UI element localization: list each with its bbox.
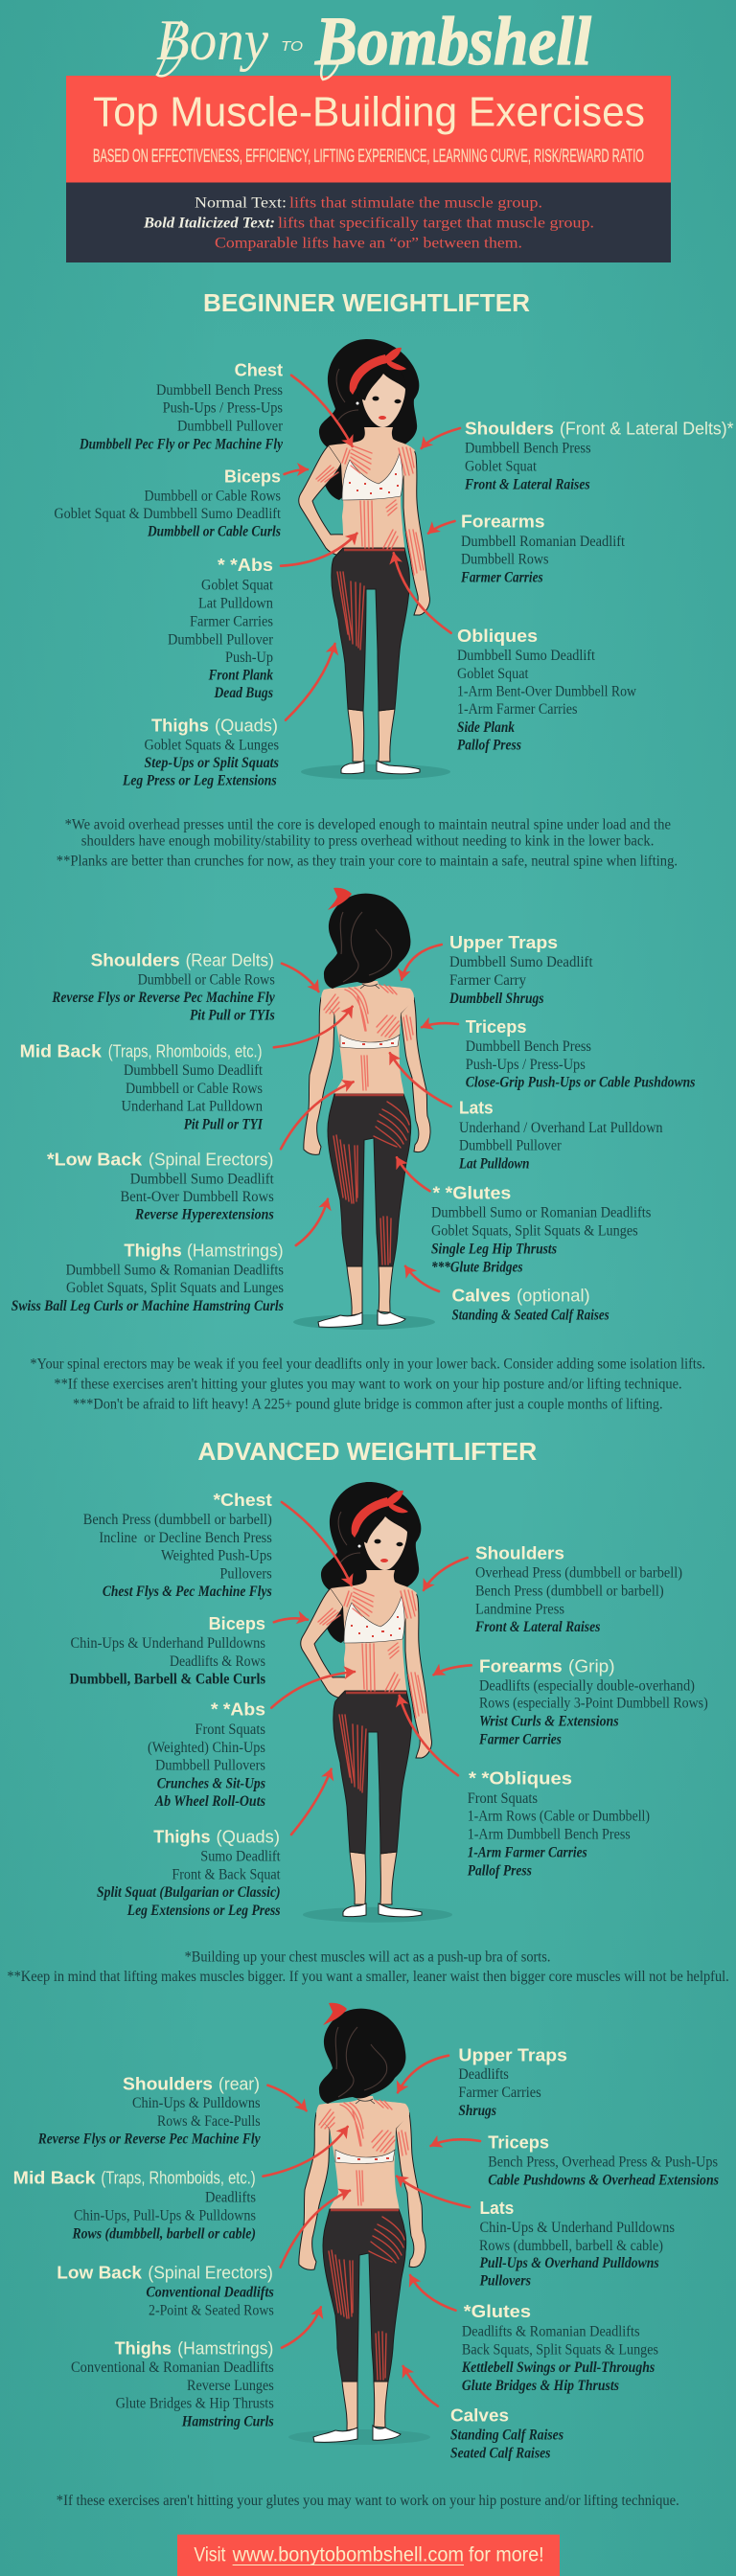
- footer text: Visit: [194, 2543, 226, 2565]
- list: calf lifts: Standing Calf Raises: [450, 2427, 564, 2443]
- panel: beginner shoulders: [464, 418, 734, 492]
- list: low back lifts: [121, 1171, 274, 1222]
- list: rear shoulder lifts: Pit Pull or TYIs: [190, 1008, 275, 1024]
- list: hamstring lifts: Glute Bridges & Hip Thrusts: [116, 2396, 274, 2412]
- list: abs lifts: Crunches & Sit-Ups: [157, 1775, 265, 1791]
- list: abs lifts: Push-Up: [225, 650, 273, 666]
- list: glute lifts: [461, 2323, 658, 2394]
- heading: shoulders front and lateral: (Front & Lateral Delts)*: [560, 418, 734, 438]
- list: chest lifts: Bench Press (dumbbell or barbell): [83, 1512, 272, 1528]
- list: oblique lifts: 1-Arm Farmer Carries: [468, 1844, 587, 1860]
- heading: shoulders: Shoulders: [475, 1542, 564, 1562]
- list: biceps lifts: Chin-Ups & Underhand Pulldowns: [71, 1635, 265, 1652]
- heading: upper traps: Upper Traps: [458, 2044, 567, 2064]
- heading: thighs hamstrings: [115, 2337, 273, 2358]
- list: hamstring lifts: Hamstring Curls: [181, 2414, 274, 2430]
- heading: mid back: [20, 1040, 262, 1060]
- footer banner: [177, 2535, 560, 2576]
- heading: obliques: Obliques: [457, 626, 538, 646]
- list: abs lifts: Front Squats: [195, 1721, 265, 1738]
- list: trap lifts: Deadlifts: [458, 2066, 509, 2083]
- list: oblique lifts: Front Squats: [468, 1790, 538, 1807]
- list: rear shoulder lifts: Reverse Flys or Reverse Pec Machine Fly: [52, 990, 275, 1006]
- list: trap lifts: [448, 954, 593, 1007]
- list: hamstring lifts: Dumbbell Sumo & Romanian Deadlifts: [66, 1263, 284, 1279]
- panel: beginner upper traps: [448, 932, 593, 1007]
- list: abs lifts: Ab Wheel Roll-Outs: [154, 1793, 265, 1810]
- list: chest lifts: [83, 1512, 272, 1600]
- list: low back lifts: 2-Point & Seated Rows: [149, 2303, 274, 2319]
- heading: beginner weightlifter: BEGINNER WEIGHTLIFTER: [203, 290, 530, 317]
- panel: beginner thighs: [122, 715, 279, 789]
- list: mid back lifts: Dumbbell Sumo Deadlift: [124, 1062, 264, 1079]
- list: lat lifts: [458, 1120, 663, 1173]
- heading: shoulders rear delts: [91, 949, 274, 969]
- list: glute lifts: Back Squats, Split Squats & Lunges: [462, 2341, 658, 2358]
- heading: thighs hamstrings: Thighs: [115, 2337, 172, 2358]
- heading: low back: Low Back: [57, 2262, 143, 2282]
- heading: shoulders rear delts: (Rear Delts): [186, 949, 274, 969]
- list: glute lifts: Deadlifts & Romanian Deadlifts: [462, 2323, 640, 2339]
- list: shoulder lifts: Front & Lateral Raises: [464, 476, 590, 492]
- legend: bold italic text: lifts that specifically target that muscle group.: [278, 216, 594, 232]
- notes: beginner back: **If these exercises aren't hitting your glutes you may want to work on your hip posture and/or lifting technique.: [54, 1377, 682, 1393]
- arrows: beginner front: [281, 376, 460, 720]
- heading: calves: Calves: [450, 2405, 509, 2425]
- list: forearm lifts: Dumbbell Romanian Deadlift: [461, 534, 626, 550]
- list: abs lifts: Front Plank: [208, 667, 273, 683]
- list: thigh lifts: Leg Press or Leg Extensions: [122, 773, 277, 789]
- panel: beginner biceps: [54, 466, 282, 539]
- list: hamstring lifts: Goblet Squats, Split Squats and Lunges: [66, 1280, 284, 1296]
- panel: beginner hamstrings: [12, 1241, 284, 1314]
- list: chest lifts: Dumbbell Pullover: [177, 419, 284, 435]
- list: abs lifts: Farmer Carries: [190, 613, 273, 629]
- list: biceps lifts: Deadlifts & Rows: [170, 1653, 265, 1670]
- heading: thighs quads: [153, 1826, 280, 1846]
- notes: beginner back: ***Don't be afraid to lift heavy! A 225+ pound glute bridge is common after just a couple months of lifting.: [73, 1397, 663, 1413]
- list: chest lifts: Incline or Decline Bench Press: [99, 1530, 272, 1546]
- list: abs lifts: (Weighted) Chin-Ups: [148, 1740, 265, 1756]
- notes: advanced front: *Building up your chest muscles will act as a push-up bra of sorts.: [185, 1949, 550, 1965]
- list: glute lifts: [431, 1205, 651, 1275]
- list: mid back lifts: Rows (dumbbell, barbell or cable): [72, 2225, 256, 2242]
- panel: advanced obliques: [468, 1768, 650, 1879]
- list: mid back lifts: Chin-Ups, Pull-Ups & Pulldowns: [74, 2208, 256, 2224]
- list: hamstring lifts: Conventional & Romanian Deadlifts: [71, 2359, 274, 2376]
- list: chest lifts: Dumbbell Bench Press: [156, 382, 283, 399]
- list: glute lifts: Single Leg Hip Thrusts: [431, 1241, 557, 1257]
- list: glute lifts: Goblet Squats, Split Squats & Lunges: [431, 1223, 638, 1240]
- logo: Bony to Bombshell: TO: [281, 38, 303, 55]
- list: oblique lifts: Side Plank: [457, 719, 515, 736]
- list: lat lifts: Chin-Ups & Underhand Pulldowns: [479, 2220, 675, 2236]
- heading: forearms: Forearms: [461, 512, 545, 532]
- heading: shoulders rear: Shoulders: [123, 2073, 213, 2093]
- list: chest lifts: Chest Flys & Pec Machine Flys: [103, 1584, 272, 1600]
- list: rear shoulder lifts: Reverse Flys or Reverse Pec Machine Fly: [37, 2131, 261, 2147]
- panel: advanced upper traps: [458, 2044, 567, 2119]
- list: lat lifts: Underhand / Overhand Lat Pulldown: [459, 1120, 663, 1136]
- list: shoulder lifts: Bench Press (dumbbell or barbell): [475, 1583, 664, 1599]
- heading: mid back: (Traps, Rhomboids, etc.): [108, 1040, 263, 1060]
- list: trap lifts: Farmer Carry: [449, 972, 526, 989]
- list: thigh lifts: [122, 737, 279, 789]
- list: trap lifts: Shrugs: [458, 2103, 496, 2119]
- list: triceps lifts: Close-Grip Push-Ups or Cable Pushdowns: [466, 1075, 696, 1091]
- panel: advanced triceps: [488, 2131, 719, 2188]
- list: glute lifts: Kettlebell Swings or Pull-Throughs: [461, 2359, 655, 2376]
- heading: shoulders rear: (rear): [218, 2073, 260, 2093]
- list: abs lifts: Dead Bugs: [214, 685, 273, 701]
- list: oblique lifts: 1-Arm Bent-Over Dumbbell Row: [457, 684, 637, 700]
- list: lat lifts: Dumbbell Pullover: [459, 1138, 563, 1154]
- heading: triceps: Triceps: [466, 1016, 527, 1037]
- heading: shoulders front and lateral: [465, 418, 734, 438]
- list: biceps lifts: Dumbbell, Barbell & Cable Curls: [69, 1672, 265, 1688]
- heading: biceps: Biceps: [224, 466, 281, 486]
- list: biceps lifts: Dumbbell or Cable Curls: [147, 523, 281, 539]
- panel: advanced lats: [479, 2198, 675, 2290]
- list: low back lifts: [146, 2285, 274, 2319]
- heading: lats: Lats: [459, 1098, 494, 1118]
- list: forearm lifts: Deadlifts (especially double-overhand): [479, 1677, 695, 1694]
- heading: glutes: * *Glutes: [433, 1183, 511, 1203]
- heading: triceps: Triceps: [488, 2131, 549, 2152]
- list: calf lifts: Standing & Seated Calf Raises: [452, 1307, 610, 1323]
- list: forearm lifts: Farmer Carries: [460, 569, 543, 585]
- footer text: [194, 2543, 544, 2565]
- list: low back lifts: Dumbbell Sumo Deadlift: [130, 1171, 274, 1187]
- heading: obliques: * *Obliques: [469, 1768, 572, 1789]
- heading: low back: (Spinal Erectors): [149, 1150, 273, 1170]
- panel: advanced hamstrings: [71, 2337, 274, 2430]
- list: abs lifts: Lat Pulldown: [198, 596, 273, 612]
- list: triceps lifts: [466, 1038, 696, 1091]
- heading: thighs hamstrings: [124, 1241, 284, 1261]
- heading: forearms grip: Forearms: [479, 1655, 563, 1676]
- notes: beginner front: **Planks are better than crunches for now, as they train your core to maintain a safe, neutral spine when lifting.: [57, 853, 678, 869]
- notes: advanced front: [7, 1949, 729, 1985]
- heading: calves optional: Calves: [452, 1285, 511, 1305]
- heading: upper traps: Upper Traps: [449, 932, 558, 952]
- heading: thighs quads: Thighs: [153, 1826, 211, 1846]
- notes: beginner front: [57, 817, 678, 869]
- heading: abs: * *Abs: [211, 1699, 265, 1720]
- heading: thighs quads: (Quads): [217, 1826, 280, 1846]
- legend: comparable lifts: Comparable lifts have an “or” between them.: [215, 236, 522, 252]
- list: biceps lifts: Dumbbell or Cable Rows: [144, 488, 281, 504]
- heading: thighs hamstrings: (Hamstrings): [187, 1241, 284, 1261]
- list: lat lifts: Rows (dumbbell, barbell & cable): [479, 2238, 663, 2254]
- panel: beginner calves: [452, 1285, 610, 1323]
- logo: Bony to Bombshell: [156, 3, 591, 80]
- list: glute lifts: Glute Bridges & Hip Thrusts: [462, 2378, 619, 2394]
- list: rear shoulder lifts: Chin-Ups & Pulldowns: [132, 2095, 261, 2111]
- list: thigh lifts: Front & Back Squat: [172, 1867, 281, 1883]
- list: chest lifts: Weighted Push-Ups: [161, 1547, 272, 1563]
- list: forearm lifts: Rows (especially 3-Point Dumbbell Rows): [479, 1696, 708, 1712]
- list: calf lifts: [450, 2427, 564, 2461]
- list: oblique lifts: 1-Arm Farmer Carries: [457, 701, 577, 718]
- list: thigh lifts: Sumo Deadlift: [200, 1849, 281, 1865]
- list: shoulder lifts: Dumbbell Bench Press: [465, 441, 591, 457]
- panel: advanced glutes: [461, 2301, 658, 2394]
- list: thigh lifts: [97, 1849, 281, 1919]
- list: biceps lifts: [69, 1635, 265, 1688]
- panel: advanced chest: [83, 1490, 272, 1600]
- logo: Bony to Bombshell: Bombshell: [314, 3, 591, 80]
- heading: mid back: Mid Back: [20, 1040, 103, 1060]
- title: Top Muscle-Building Exercises: [93, 89, 645, 136]
- panel: advanced rear shoulders: [37, 2073, 261, 2147]
- list: trap lifts: Dumbbell Sumo Deadlift: [449, 954, 593, 970]
- legend: bold italic text: [143, 216, 594, 232]
- heading: thighs quads: [151, 715, 278, 735]
- panel: advanced thighs: [97, 1826, 281, 1919]
- heading: shoulders front and lateral: Shoulders: [465, 418, 554, 438]
- list: forearm lifts: [478, 1677, 708, 1747]
- list: oblique lifts: Pallof Press: [468, 1862, 532, 1879]
- list: triceps lifts: Dumbbell Bench Press: [466, 1038, 591, 1055]
- note: advanced back: *If these exercises aren't hitting your glutes you may want to work on your hip posture and/or lifting technique.: [57, 2493, 679, 2509]
- list: biceps lifts: [54, 488, 282, 539]
- heading: chest: Chest: [235, 360, 283, 380]
- list: lat lifts: [479, 2220, 675, 2290]
- arrows: advanced front: [271, 1502, 472, 1835]
- list: chest lifts: Dumbbell Pec Fly or Pec Machine Fly: [79, 436, 283, 452]
- list: chest lifts: [79, 382, 284, 452]
- notes: beginner front: *We avoid overhead presses until the core is developed enough to maintain neutral spine under load and the: [65, 817, 671, 833]
- list: forearm lifts: [460, 534, 626, 585]
- heading: low back: *Low Back: [47, 1150, 143, 1170]
- panel: beginner triceps: [466, 1016, 696, 1091]
- list: chest lifts: Push-Ups / Press-Ups: [163, 400, 283, 417]
- heading: thighs quads: Thighs: [151, 715, 209, 735]
- panel: advanced forearms: [478, 1655, 708, 1747]
- heading: mid back: [13, 2167, 256, 2187]
- heading: low back: [47, 1150, 273, 1170]
- figure: advanced front: [301, 1482, 452, 1923]
- list: triceps lifts: Push-Ups / Press-Ups: [466, 1057, 586, 1073]
- panel: beginner abs: [168, 555, 274, 701]
- list: shoulder lifts: [464, 441, 591, 492]
- list: rear shoulder lifts: [37, 2095, 261, 2147]
- list: mid back lifts: Pit Pull or TYI: [184, 1116, 264, 1132]
- list: shoulder lifts: Landmine Press: [475, 1601, 564, 1617]
- list: mid back lifts: Dumbbell or Cable Rows: [126, 1081, 263, 1097]
- list: trap lifts: [458, 2066, 541, 2119]
- panel: legend: [66, 182, 671, 262]
- list: abs lifts: Goblet Squat: [201, 578, 274, 594]
- list: trap lifts: Dumbbell Shrugs: [448, 991, 544, 1007]
- list: abs lifts: [168, 578, 274, 701]
- list: oblique lifts: [468, 1790, 650, 1879]
- list: glute lifts: Dumbbell Sumo or Romanian Deadlifts: [431, 1205, 651, 1221]
- heading: shoulders rear delts: Shoulders: [91, 949, 180, 969]
- heading: forearms grip: (Grip): [568, 1655, 615, 1676]
- list: forearm lifts: Dumbbell Rows: [461, 552, 548, 568]
- list: biceps lifts: Goblet Squat & Dumbbell Sumo Deadlift: [54, 506, 282, 522]
- list: mid back lifts: Deadlifts: [205, 2190, 256, 2206]
- list: shoulder lifts: Front & Lateral Raises: [474, 1619, 600, 1635]
- list: calf lifts: Seated Calf Raises: [450, 2445, 550, 2461]
- panel: beginner forearms: [460, 512, 626, 585]
- heading: low back: [57, 2262, 273, 2282]
- panel: beginner glutes: [431, 1183, 651, 1275]
- legend: bold italic text: Bold Italicized Text:: [143, 216, 275, 232]
- list: mid back lifts: [72, 2190, 256, 2242]
- list: oblique lifts: Dumbbell Sumo Deadlift: [457, 648, 596, 664]
- heading: low back: (Spinal Erectors): [148, 2262, 273, 2282]
- list: thigh lifts: Step-Ups or Split Squats: [144, 755, 279, 771]
- list: forearm lifts: Farmer Carries: [478, 1731, 562, 1747]
- footer text: for more!: [469, 2543, 544, 2565]
- list: hamstring lifts: Reverse Lunges: [187, 2378, 274, 2394]
- list: lat lifts: Pullovers: [479, 2273, 531, 2290]
- list: oblique lifts: [457, 648, 637, 754]
- notes: beginner front: shoulders have enough mobility/stability to press overhead without needing to kink in the lower back.: [81, 833, 654, 850]
- legend: normal text: Normal Text:: [195, 195, 287, 212]
- list: lat lifts: Lat Pulldown: [458, 1156, 529, 1173]
- figure: beginner front: [299, 339, 450, 780]
- heading: calves optional: [452, 1285, 590, 1305]
- notes: beginner back: [30, 1356, 705, 1413]
- heading: lats: Lats: [479, 2198, 514, 2218]
- panel: advanced calves: [450, 2405, 564, 2461]
- panel: beginner chest: [79, 360, 284, 452]
- arrows: beginner back: [274, 945, 458, 1291]
- footer text: www.bonytobombshell.com: [232, 2543, 464, 2565]
- list: triceps lifts: Bench Press, Overhead Press & Push-Ups: [488, 2154, 718, 2171]
- list: rear shoulder lifts: [52, 972, 275, 1024]
- list: glute lifts: ***Glute Bridges: [431, 1259, 523, 1275]
- list: trap lifts: Farmer Carries: [458, 2085, 541, 2101]
- figure: advanced back: [288, 2003, 430, 2445]
- logo: Bony to Bombshell: Bony: [156, 9, 268, 72]
- list: abs lifts: Dumbbell Pullovers: [155, 1758, 265, 1774]
- heading: thighs hamstrings: Thighs: [124, 1241, 182, 1261]
- list: mid back lifts: Underhand Lat Pulldown: [121, 1099, 263, 1115]
- list: lat lifts: Pull-Ups & Overhand Pulldowns: [479, 2255, 659, 2271]
- list: rear shoulder lifts: Dumbbell or Cable Rows: [138, 972, 275, 989]
- heading: shoulders rear: [123, 2073, 260, 2093]
- list: thigh lifts: Split Squat (Bulgarian or Classic): [97, 1884, 281, 1901]
- panel: advanced biceps: [69, 1613, 265, 1688]
- list: chest lifts: Pullovers: [219, 1565, 272, 1582]
- list: mid back lifts: [121, 1062, 264, 1132]
- legend: normal text: [195, 195, 542, 212]
- panel: advanced abs: [148, 1699, 265, 1810]
- list: shoulder lifts: Overhead Press (dumbbell or barbell): [475, 1565, 682, 1582]
- panel: beginner low back: [47, 1150, 274, 1222]
- list: abs lifts: Dumbbell Pullover: [168, 631, 274, 648]
- panel: beginner rear shoulders: [52, 949, 275, 1024]
- panel: advanced low back: [57, 2262, 274, 2319]
- panel: beginner mid back: [20, 1040, 264, 1132]
- list: abs lifts: [148, 1721, 265, 1810]
- list: shoulder lifts: Goblet Squat: [465, 459, 538, 475]
- list: thigh lifts: Leg Extensions or Leg Press: [126, 1903, 281, 1919]
- list: oblique lifts: Pallof Press: [457, 738, 521, 754]
- list: hamstring lifts: [71, 2359, 274, 2430]
- list: low back lifts: Conventional Deadlifts: [146, 2285, 274, 2301]
- heading: calves optional: (optional): [517, 1285, 590, 1305]
- arrows: advanced back: [263, 2056, 480, 2406]
- list: hamstring lifts: [12, 1263, 284, 1314]
- panel: advanced mid back: [13, 2167, 256, 2242]
- list: triceps lifts: [488, 2154, 719, 2188]
- list: rear shoulder lifts: Rows & Face-Pulls: [157, 2113, 261, 2130]
- list: shoulder lifts: [474, 1565, 682, 1635]
- heading: biceps: Biceps: [209, 1613, 265, 1633]
- list: thigh lifts: Goblet Squats & Lunges: [144, 737, 279, 753]
- heading: glutes: *Glutes: [464, 2301, 531, 2321]
- heading: forearms grip: [479, 1655, 615, 1676]
- list: hamstring lifts: Swiss Ball Leg Curls or Machine Hamstring Curls: [12, 1298, 284, 1314]
- panel: advanced shoulders: [474, 1542, 682, 1635]
- heading: mid back: Mid Back: [13, 2167, 96, 2187]
- list: oblique lifts: 1-Arm Dumbbell Bench Press: [468, 1826, 631, 1842]
- list: oblique lifts: 1-Arm Rows (Cable or Dumbbell): [468, 1809, 650, 1825]
- panel: beginner lats: [458, 1098, 663, 1173]
- heading: mid back: (Traps, Rhomboids, etc.): [101, 2167, 256, 2187]
- list: low back lifts: Bent-Over Dumbbell Rows: [121, 1189, 274, 1205]
- legend: normal text: lifts that stimulate the muscle group.: [289, 195, 542, 212]
- heading: thighs hamstrings: (Hamstrings): [177, 2337, 273, 2358]
- panel: beginner obliques: [457, 626, 637, 754]
- heading: chest: *Chest: [213, 1490, 272, 1510]
- list: forearm lifts: Wrist Curls & Extensions: [479, 1713, 619, 1729]
- heading: thighs quads: (Quads): [215, 715, 278, 735]
- heading: advanced weightlifter: ADVANCED WEIGHTLIFTER: [197, 1439, 537, 1466]
- panel: title banner: [66, 76, 671, 182]
- list: oblique lifts: Goblet Squat: [457, 666, 529, 682]
- heading: abs: * *Abs: [218, 555, 273, 575]
- figure: beginner back: [293, 888, 435, 1330]
- list: low back lifts: Reverse Hyperextensions: [134, 1206, 274, 1222]
